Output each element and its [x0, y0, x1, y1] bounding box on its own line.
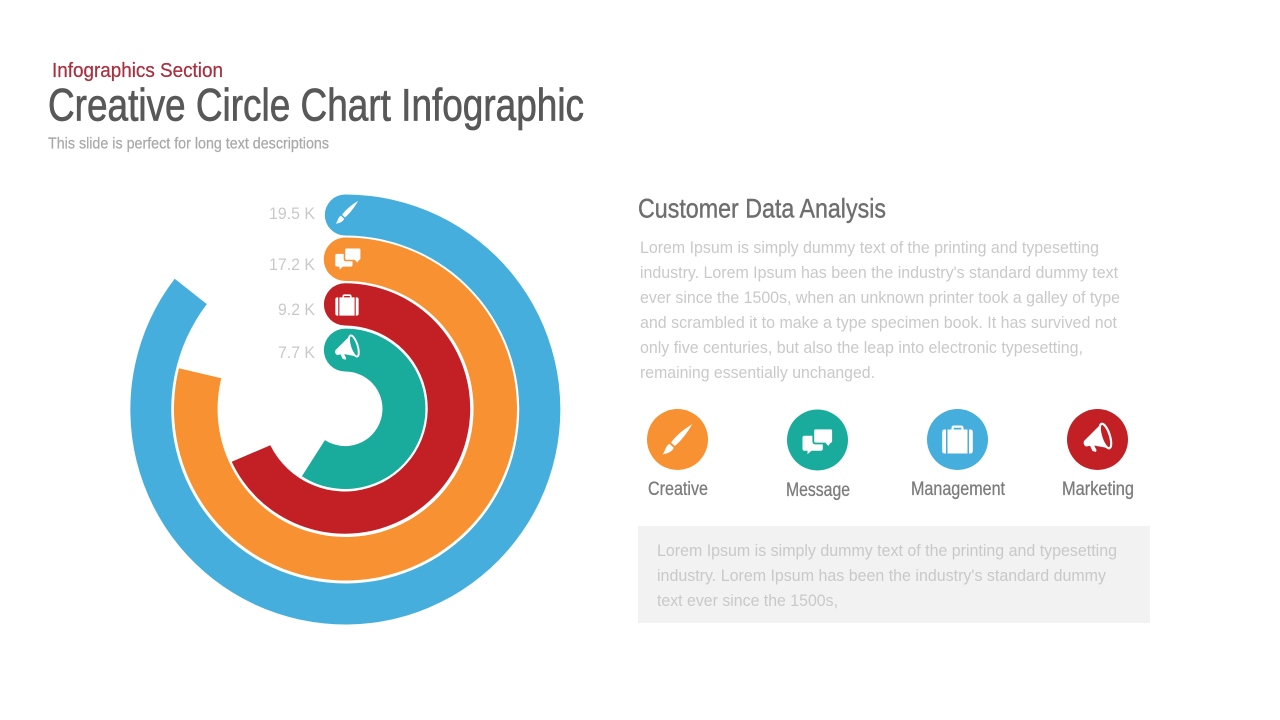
- category: marketing: [1062, 409, 1134, 500]
- ring: teal 7.7 K: [302, 329, 425, 489]
- body paragraph: and scrambled it to make a type specimen book. It has survived not: [640, 314, 1117, 332]
- value: 9.2 K: 9.2 K: [278, 301, 315, 319]
- heading: customer data analysis: Customer Data Analysis: [638, 194, 886, 224]
- category: message: [786, 410, 850, 501]
- value: 17.2 K: 17.2 K: [269, 256, 315, 274]
- ring: red 9.2 K: [232, 283, 470, 534]
- section label: Infographics Section: [52, 59, 223, 82]
- body paragraph: only five centuries, but also the leap into electronic typesetting,: [640, 339, 1083, 357]
- category: management: [911, 409, 1005, 500]
- icon: megaphone on teal: [335, 334, 361, 360]
- subtitle: This slide is perfect for long text descriptions: [48, 136, 329, 152]
- body paragraph: [640, 239, 1120, 382]
- label: marketing: Marketing: [1062, 478, 1134, 500]
- callout text: [657, 542, 1117, 610]
- callout text: text ever since the 1500s,: [657, 592, 838, 610]
- icon: speech bubbles on orange: [335, 248, 361, 270]
- body paragraph: remaining essentially unchanged.: [640, 364, 875, 382]
- radial chart: [130, 194, 560, 624]
- body paragraph: industry. Lorem Ipsum has been the industry's standard dummy text: [640, 264, 1118, 282]
- title: Creative Circle Chart Infographic: [48, 80, 584, 130]
- ring: blue 19.5 K: [130, 194, 560, 624]
- body paragraph: Lorem Ipsum is simply dummy text of the printing and typesetting: [640, 239, 1099, 257]
- icon: briefcase on red: [335, 294, 359, 316]
- label: management: Management: [911, 478, 1005, 500]
- callout text: industry. Lorem Ipsum has been the industry's standard dummy: [657, 567, 1107, 585]
- icon: brush badge: [647, 409, 708, 470]
- category: creative: [647, 409, 708, 500]
- body paragraph: ever since the 1500s, when an unknown printer took a galley of type: [640, 289, 1120, 307]
- callout text: Lorem Ipsum is simply dummy text of the printing and typesetting: [657, 542, 1117, 560]
- label: creative: Creative: [648, 478, 708, 500]
- icon: megaphone badge: [1067, 409, 1128, 470]
- icon: brush on blue: [336, 201, 358, 224]
- value: 19.5 K: 19.5 K: [269, 205, 315, 223]
- label: message: Message: [786, 479, 850, 501]
- callout panel: [638, 526, 1150, 623]
- value: 7.7 K: 7.7 K: [278, 344, 315, 362]
- icon: speech bubbles badge: [787, 410, 848, 470]
- ring: orange 17.2 K: [174, 238, 517, 581]
- callout background: [638, 526, 1150, 623]
- icon: briefcase badge: [927, 409, 988, 470]
